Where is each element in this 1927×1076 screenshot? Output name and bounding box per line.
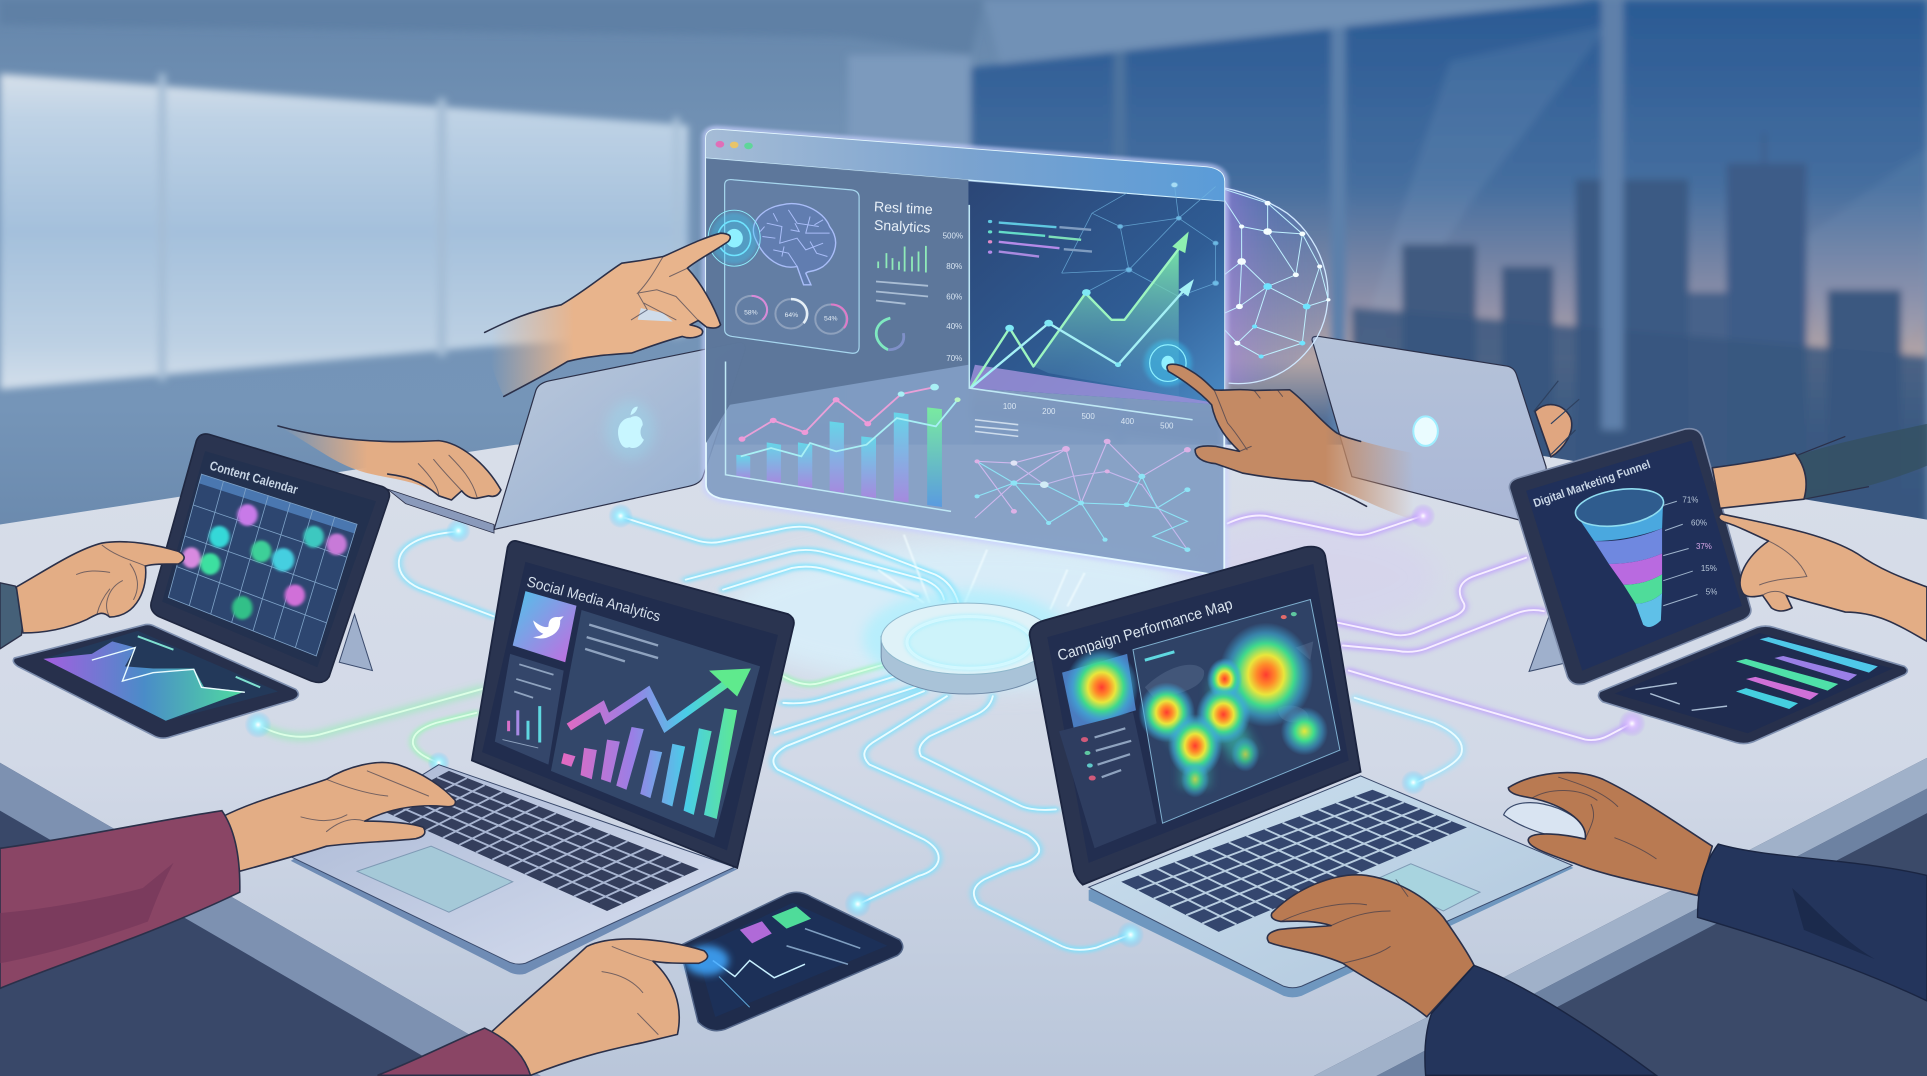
- laptop: campaign performance map: [1030, 547, 1573, 997]
- calendar grid: [168, 474, 357, 656]
- keyboard: [1121, 790, 1467, 932]
- keyboard: [378, 771, 699, 911]
- bar and line chart: [726, 361, 961, 511]
- funnel percentages: 71%: [1682, 495, 1698, 504]
- trackpad: [1375, 864, 1480, 911]
- arm and hand typing on social laptop: [0, 763, 455, 988]
- ceiling: [0, 0, 983, 55]
- floor under the table: [0, 725, 1927, 1076]
- neural pattern in chart: [1062, 182, 1219, 296]
- title bar: [706, 130, 1224, 202]
- side heat panel: [1059, 648, 1157, 848]
- funnel percentages: 37%: [1696, 542, 1712, 551]
- ring labels: [744, 309, 838, 323]
- glowing circuit traces: cyan network: [399, 516, 1131, 950]
- body: [151, 434, 389, 682]
- back left laptop: [387, 343, 745, 533]
- chart axis labels: 500%: [943, 231, 963, 240]
- laptop: social media analytics: [291, 541, 794, 975]
- mouse, hand and sleeve on right: [1504, 773, 1927, 1001]
- hand on back laptop: [278, 426, 501, 500]
- conference table: [0, 445, 1927, 1076]
- touch glow: [685, 946, 729, 975]
- network sphere outside the panel: [1127, 184, 1331, 384]
- base: [1089, 777, 1573, 997]
- chart axis labels: [943, 231, 1174, 431]
- stand: [339, 614, 372, 671]
- glass panel: [706, 130, 1224, 576]
- chart axis labels: 60%: [946, 293, 962, 302]
- funnel: [1570, 483, 1669, 627]
- tablet: content calendar: [151, 434, 389, 682]
- chart axis labels: 100: [1003, 402, 1017, 411]
- trace endpoint nodes: [245, 504, 1646, 948]
- heading: real time analytics: Snalytics: [874, 217, 931, 236]
- blurred window wall: [0, 74, 688, 389]
- small tablet: line chart: [680, 892, 903, 1031]
- chart axis labels: 40%: [946, 322, 962, 331]
- icon: twitter tile: [513, 591, 576, 662]
- hand pointing at brain: [485, 233, 730, 396]
- back right laptop: [1312, 336, 1551, 528]
- chart axis labels: 200: [1042, 407, 1056, 416]
- world heat map: [1133, 600, 1340, 823]
- ring labels: 64%: [785, 312, 798, 319]
- main growth chart: [969, 205, 1194, 420]
- title: campaign performance map: Campaign Performance Map: [1056, 596, 1235, 665]
- trackpad: [357, 846, 513, 912]
- heading: real time analytics: Resl time: [874, 198, 933, 217]
- holographic dashboard: [706, 130, 1331, 576]
- lid: [472, 541, 794, 868]
- chart axis labels: 500: [1081, 412, 1095, 421]
- progress rings: [736, 296, 847, 334]
- arm and hand on small tablet: [378, 939, 708, 1075]
- hands at funnel tablet: [1712, 424, 1927, 641]
- chart axis labels: 500: [1160, 422, 1174, 431]
- icon: glowing right logo: [1413, 416, 1438, 446]
- icon: brain: [753, 204, 836, 285]
- funnel percentages: 5%: [1706, 588, 1717, 597]
- ring labels: 58%: [744, 309, 758, 316]
- lid: [1030, 547, 1361, 885]
- flat tablet: wave chart: [13, 624, 298, 738]
- base: [291, 767, 737, 975]
- icon: glowing logo: [606, 400, 655, 459]
- heading: real time analytics: [874, 198, 933, 236]
- tablet: digital marketing funnel: [1509, 429, 1751, 684]
- title: content calendar: Content Calendar: [208, 458, 300, 497]
- chart axis labels: 70%: [946, 354, 962, 363]
- funnel percentages: 15%: [1701, 564, 1717, 573]
- mini bars and lines in real time analytics block: [876, 246, 928, 350]
- pillar: [848, 55, 971, 448]
- hand on calendar tablet: [0, 542, 184, 649]
- flat tablet: bar list: [1598, 626, 1907, 744]
- legend lines: [999, 223, 1092, 257]
- holographic projector base: [863, 535, 1085, 694]
- title: digital marketing funnel: Digital Marketing Funnel: [1532, 458, 1652, 510]
- city windows: [971, 0, 1927, 528]
- title: social media analytics: Social Media Analytics: [525, 574, 662, 625]
- funnel percentages: [1682, 495, 1717, 597]
- ring labels: 54%: [824, 316, 838, 323]
- panel outer glow: [706, 130, 1224, 576]
- brain card: [725, 180, 859, 353]
- upper-left content area: [706, 158, 968, 443]
- network line chart: [974, 420, 1191, 552]
- chart axis labels: 400: [1121, 417, 1135, 426]
- left stat panel: [495, 654, 564, 765]
- hand and sleeve behind right laptop: [1534, 381, 1579, 457]
- hand pointing at chart: [1167, 364, 1414, 520]
- touch rings: [708, 210, 1192, 386]
- calendar events: [182, 504, 347, 620]
- glowing circuit traces: green and purple: [258, 516, 1633, 783]
- right chart panel: [968, 182, 1224, 405]
- hand and sleeve on campaign keyboard: [1267, 875, 1656, 1075]
- main growth chart: [551, 610, 760, 838]
- funnel percentages: 60%: [1691, 519, 1707, 528]
- chart axis labels: 80%: [946, 262, 962, 271]
